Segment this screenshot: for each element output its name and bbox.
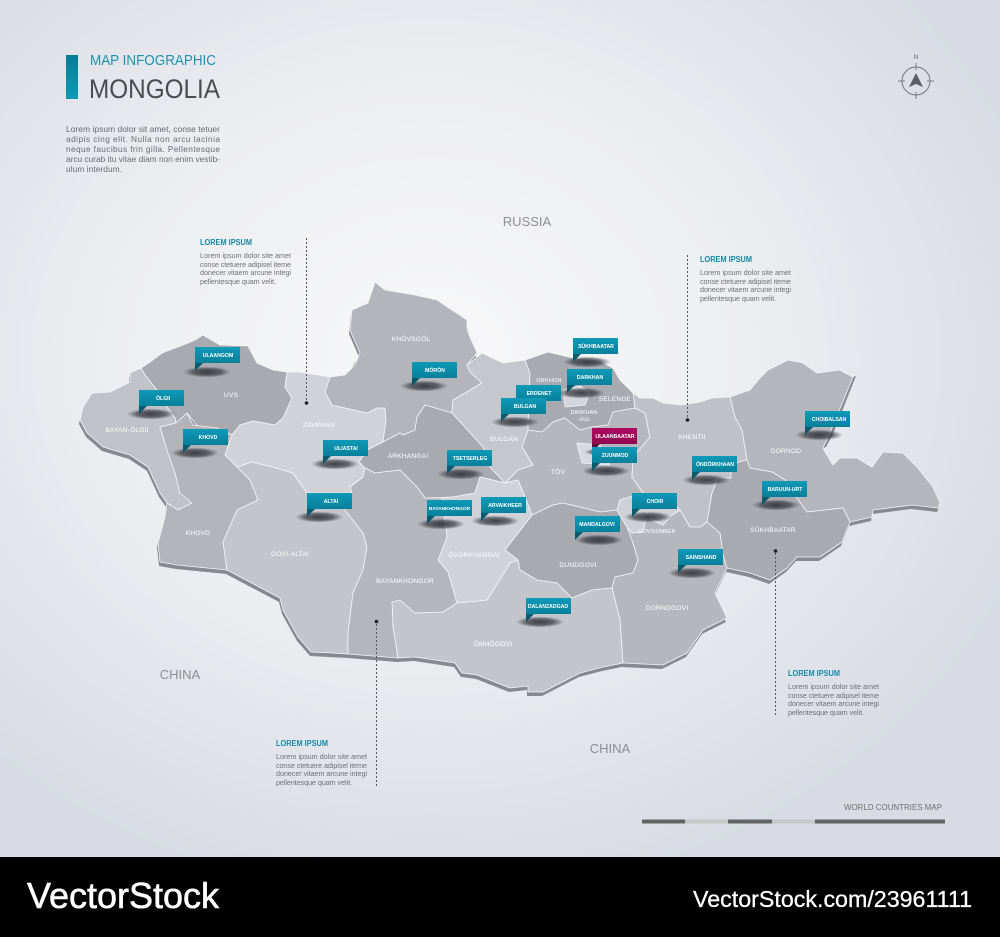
intro paragraph: adipis cing elit. Nulla non arcu lacinia	[66, 134, 220, 144]
callout: right: donecer vitaem arcune integi	[788, 699, 879, 708]
province: Tov	[505, 408, 650, 515]
pin: Mandalgovi	[575, 516, 623, 546]
pin: Khovd city: KHOVD	[199, 435, 218, 441]
province labels: BULGAN	[490, 436, 518, 443]
callout: bottom: LOREM IPSUM	[276, 739, 328, 748]
pin: Ondorkhaan	[682, 456, 737, 486]
pin: Darkhan: DARKHAN	[577, 375, 603, 381]
pin: Sainshand: SAINSHAND	[686, 555, 717, 561]
callout: top left	[200, 238, 291, 286]
pin: Khovd city	[171, 429, 228, 458]
province: Bulgan	[452, 353, 533, 483]
map extrusion shadow	[79, 286, 939, 696]
province labels: KHOVD	[186, 530, 210, 537]
pin: Darkhan	[557, 369, 612, 398]
callout: top right: pellentesque quam velit.	[700, 294, 776, 303]
pin: Zuunmod	[582, 447, 637, 476]
pin: Dalanzadgad	[516, 598, 571, 628]
province labels: KHENTII	[678, 434, 706, 441]
pin: Arvaikheer	[471, 497, 526, 526]
pin: Altai: ALTAI	[324, 499, 339, 505]
pin: Zuunmod: ZUUNMOD	[602, 453, 629, 459]
pin: Dalanzadgad: DALANZADGAD	[528, 604, 568, 610]
pin: Ulaanbaatar: ULAANBAATAR	[595, 434, 635, 440]
pin: Uliastai	[311, 440, 368, 470]
province labels: -UUL	[578, 417, 590, 423]
pin: Bulgan city: BULGAN	[514, 404, 536, 410]
scale bar	[642, 820, 945, 824]
icon: compass	[898, 54, 934, 99]
province labels: UVS	[224, 392, 238, 399]
intro paragraph: ulum interdum.	[66, 164, 122, 174]
province: Omnogovi	[392, 560, 623, 692]
callout line: bottom	[375, 620, 378, 787]
pin: Ulaangom: ULAANGOM	[203, 353, 233, 359]
intro paragraph: neque faucibus frin gilla. Pellentesque	[66, 144, 220, 154]
title block: MONGOLIA	[89, 74, 220, 104]
callout: bottom	[276, 739, 367, 787]
intro paragraph	[66, 124, 220, 174]
province: Dornod	[730, 360, 940, 522]
footer bar: VectorStock	[27, 875, 220, 916]
pin: Sukhbaatar city	[563, 338, 618, 368]
callout: bottom: pellentesque quam velit.	[276, 778, 352, 787]
province labels: SÜKHBAATAR	[750, 526, 796, 534]
callout: bottom: conse ctetuere adipisel iteme	[276, 761, 367, 770]
scale bar caption: WORLD COUNTRIES MAP	[844, 802, 942, 812]
callout: top right: donecer vitaem arcune integi	[700, 285, 791, 294]
province: Khovd	[158, 413, 258, 570]
province: Uvs	[141, 335, 292, 435]
pin: Olgii: ÖLGII	[156, 395, 171, 402]
pin: Bayankhongor city	[417, 500, 472, 530]
country label: Russia: RUSSIA	[503, 214, 552, 229]
province labels: ARKHANGAI	[388, 453, 428, 460]
province labels: KHÖVSGÖL	[392, 335, 430, 343]
province: Ovorkhangai	[438, 477, 532, 603]
province labels: SELENGE	[599, 396, 632, 403]
pin: Tsetserleg	[437, 450, 492, 480]
callout line: top right	[686, 255, 689, 422]
province labels: ORKHON	[536, 378, 562, 384]
callout line: right	[774, 549, 777, 717]
province: Govi-Altai	[223, 462, 367, 654]
province: Dundgovi	[505, 503, 638, 598]
pin: Choir: CHOIR	[647, 499, 664, 505]
callout: right: pellentesque quam velit.	[788, 708, 864, 717]
callout: right: Lorem ipsum dolor site amet	[788, 682, 879, 691]
province labels: ÖMNÖGOVI	[474, 640, 512, 648]
province: Bayan-Olgii	[80, 368, 192, 510]
intro paragraph: Lorem ipsum dolor sit amet, conse tetuer	[66, 124, 220, 134]
pin: Moron: MÖRÖN	[425, 367, 445, 374]
province: Bayankhongor	[345, 468, 457, 658]
country label: China south: CHINA	[590, 741, 631, 756]
pin: Ondorkhaan: ÖNDÖRKHAAN	[696, 461, 734, 468]
callout: right	[788, 669, 879, 717]
pin: Moron	[400, 362, 457, 392]
callout: right: conse ctetuere adipisel iteme	[788, 691, 879, 700]
province labels: DARKHAN	[571, 410, 597, 416]
callout: top right: LOREM IPSUM	[700, 255, 752, 264]
province labels: BAYANKHONGOR	[376, 578, 434, 585]
province labels: TÖV	[551, 468, 565, 476]
pin: Olgii	[127, 390, 184, 420]
province: Selenge and Orkhon	[525, 352, 635, 432]
title block: MAP INFOGRAPHIC	[90, 52, 216, 69]
callout: top right: Lorem ipsum dolor site amet	[700, 268, 791, 277]
pin: Ulaangom	[183, 347, 240, 378]
pin: Choibalsan	[795, 411, 850, 440]
pin: Baruun-Urt	[752, 481, 807, 510]
province: Ulaanbaatar	[577, 443, 610, 465]
callout: right: LOREM IPSUM	[788, 669, 840, 678]
pin: Ulaanbaatar	[584, 428, 637, 456]
province: Govisumber	[617, 493, 680, 533]
pin: Altai	[295, 493, 352, 522]
pin: Bayankhongor city: BAYANKHONGOR	[429, 506, 471, 512]
pin: Uliastai: ULIASTAI	[334, 446, 358, 452]
title block	[66, 52, 220, 104]
icon: compass: N	[914, 54, 919, 61]
callout line: top left	[305, 238, 308, 405]
province labels: GOVISÜMBER	[638, 528, 676, 535]
callout: bottom: donecer vitaem arcune integi	[276, 769, 367, 778]
province: Sukhbaatar	[707, 460, 850, 580]
callout: top right: conse ctetuere adipisel iteme	[700, 277, 791, 286]
pin: Sainshand	[668, 549, 723, 578]
callout: top left: donecer vitaem arcune integi	[200, 268, 291, 277]
pin: Baruun-Urt: BARUUN-URT	[768, 487, 803, 493]
province: Darkhan-Uul	[563, 386, 590, 407]
province: Zavkhan	[225, 372, 386, 493]
pin: Erdenet	[516, 385, 561, 401]
province: Arkhangai	[359, 405, 505, 498]
province labels: ÖVÖRKHANGAI	[448, 551, 500, 559]
province labels: DORNOD	[771, 448, 801, 455]
province: Khovsgol	[325, 282, 482, 442]
callout: bottom: Lorem ipsum dolor site amet	[276, 752, 367, 761]
province labels	[105, 335, 801, 648]
pin: Tsetserleg: TSETSERLEG	[453, 456, 487, 462]
province: Khentii	[632, 393, 747, 527]
country label: China west: CHINA	[160, 667, 201, 682]
map: provinces	[80, 282, 940, 692]
pin: Sukhbaatar city: SÜKHBAATAR	[578, 343, 614, 350]
pin: Bulgan city	[491, 398, 546, 428]
province labels: GOVI-ALTAI	[271, 551, 309, 558]
callout: top left: pellentesque quam velit.	[200, 277, 276, 286]
callout: top left: Lorem ipsum dolor site amet	[200, 251, 291, 260]
province labels: DUNDGOVI	[559, 562, 597, 569]
province: Dornogovi	[612, 510, 727, 665]
province labels: DORNOGOVI	[646, 605, 688, 612]
province labels: BAYAN-ÖLGII	[105, 426, 149, 434]
pin: Arvaikheer: ARVAIKHEER	[488, 503, 522, 509]
province labels: ZAVKHAN	[303, 422, 335, 429]
pin: Choibalsan: CHOIBALSAN	[812, 417, 847, 423]
callout: top left: LOREM IPSUM	[200, 238, 252, 247]
callout: top right	[700, 255, 791, 303]
pin: Mandalgovi: MANDALGOVI	[579, 522, 615, 528]
pin: Erdenet: ERDENET	[527, 391, 552, 397]
footer bar: VectorStock.com/23961111	[693, 886, 972, 912]
callout: top left: conse ctetuere adipisel iteme	[200, 260, 291, 269]
intro paragraph: arcu curab itu vitae diam non enim vestib-	[66, 154, 220, 164]
pin: Choir	[624, 493, 677, 522]
footer bar	[0, 857, 1000, 937]
